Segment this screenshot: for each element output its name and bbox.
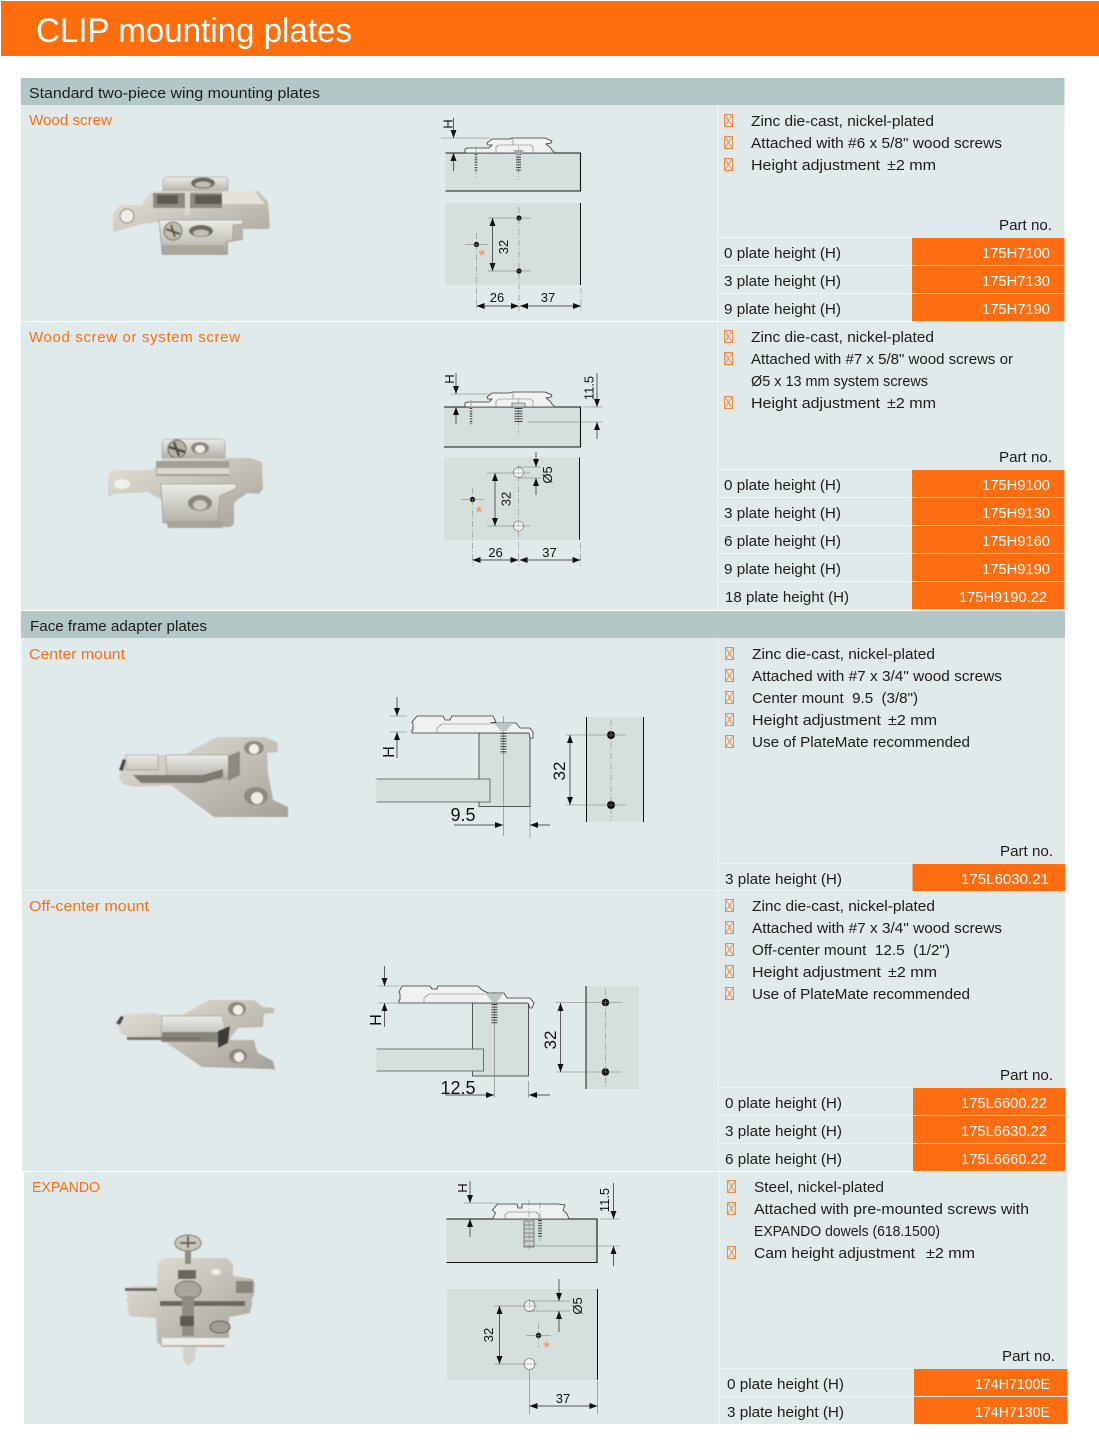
part number table: 175H9130 <box>982 505 1050 522</box>
panel: center mount <box>22 638 1065 891</box>
feature list: Attached with #7 x 3/4" wood screws <box>752 920 1002 937</box>
diagram: center mount <box>376 697 644 838</box>
photo: off-center mount plate <box>116 1000 275 1070</box>
photo: system screw plate <box>108 439 263 528</box>
heading: off-center mount: Off-center mount <box>29 898 150 915</box>
diagram: system screw drilling: H <box>442 374 457 384</box>
diagram: system screw drilling <box>442 373 603 566</box>
part number table: Part no. <box>1002 1348 1055 1365</box>
part number table: 3 plate height (H) <box>727 1404 844 1421</box>
title banner <box>1 1 1099 56</box>
part number table: 3 plate height (H) <box>724 273 841 290</box>
heading: wood screw: Wood screw <box>29 112 112 129</box>
panel: EXPANDO <box>24 1172 1068 1424</box>
part number table: 0 plate height (H) <box>724 477 841 494</box>
part number table: 174H7130E <box>975 1404 1050 1421</box>
diagram: system screw drilling: 26 <box>488 545 503 560</box>
part number table: 175H9100 <box>982 477 1050 494</box>
part number table: 3 plate height (H) <box>724 505 841 522</box>
feature list <box>724 113 1002 174</box>
feature list: Height adjustment <box>751 395 881 412</box>
part number table: 6 plate height (H) <box>725 1151 842 1168</box>
feature list: ±2 mm <box>926 1245 975 1262</box>
feature list: Off-center mount 12.5 (1/2") <box>752 942 950 959</box>
feature list <box>726 898 1002 1003</box>
diagram: system screw drilling: 32 <box>498 492 514 506</box>
part number table: 9 plate height (H) <box>724 561 841 578</box>
diagram: EXPANDO drilling: * <box>543 1338 550 1357</box>
heading: EXPANDO: EXPANDO <box>32 1179 100 1196</box>
part number table: 175L6660.22 <box>961 1151 1047 1168</box>
title: CLIP mounting plates <box>36 12 352 50</box>
diagram: system screw drilling: 11.5 <box>582 376 596 400</box>
feature list <box>728 1179 1029 1262</box>
diagram: system screw drilling: Ø5 <box>540 466 555 484</box>
feature list: Ø5 x 13 mm system screws <box>751 373 928 390</box>
feature list: ±2 mm <box>888 964 937 981</box>
diagram: EXPANDO drilling: 32 <box>481 1328 496 1342</box>
photo: wood screw plate <box>113 177 270 255</box>
feature list: Cam height adjustment <box>754 1245 916 1262</box>
diagram: wood screw drilling: 32 <box>496 240 511 254</box>
feature list: Zinc die-cast, nickel-plated <box>751 113 934 130</box>
part number table: 175L6630.22 <box>961 1123 1047 1140</box>
part number table: 9 plate height (H) <box>724 301 841 318</box>
part number table: Part no. <box>1000 1067 1053 1084</box>
part number table: 175H7100 <box>982 245 1050 262</box>
diagram: off-center mount: 12.5 <box>440 1078 476 1098</box>
diagram: off-center mount: 32 <box>541 1031 560 1049</box>
photo: EXPANDO plate <box>125 1235 255 1365</box>
part number table: 0 plate height (H) <box>724 245 841 262</box>
feature list: ±2 mm <box>887 157 936 174</box>
feature list: Steel, nickel-plated <box>754 1179 884 1196</box>
diagram: center mount: H <box>381 746 398 758</box>
part number table: 175L6030.21 <box>961 871 1049 888</box>
section band: face frame adapter plates: Face frame adapter plates <box>30 618 207 635</box>
heading: center mount: Center mount <box>29 646 126 663</box>
feature list: Center mount 9.5 (3/8") <box>752 690 918 707</box>
feature list: Zinc die-cast, nickel-plated <box>752 898 935 915</box>
feature list: Height adjustment <box>752 712 882 729</box>
diagram: wood screw drilling: 26 <box>490 290 504 305</box>
part number table <box>718 843 1065 891</box>
diagram: wood screw drilling <box>440 118 581 311</box>
feature list: Height adjustment <box>751 157 881 174</box>
feature list: Attached with pre-mounted screws with <box>754 1201 1029 1218</box>
diagram: wood screw drilling: 37 <box>541 290 555 305</box>
diagram: system screw drilling: * <box>476 503 483 522</box>
part number table: 175L6600.22 <box>961 1095 1047 1112</box>
part number table <box>717 449 1064 609</box>
feature list: Zinc die-cast, nickel-plated <box>752 646 935 663</box>
part number table: Part no. <box>999 217 1052 234</box>
feature list: Height adjustment <box>752 964 882 981</box>
feature list <box>726 646 1002 751</box>
feature list: Zinc die-cast, nickel-plated <box>751 329 934 346</box>
feature list: EXPANDO dowels (618.1500) <box>754 1223 940 1240</box>
part number table: 175H9190 <box>982 561 1050 578</box>
diagram: center mount: 32 <box>550 762 569 780</box>
part number table: 174H7100E <box>975 1376 1050 1393</box>
feature list: Attached with #7 x 5/8" wood screws or <box>751 351 1013 368</box>
panel: wood screw or system screw <box>21 322 1064 610</box>
part number table <box>717 217 1064 321</box>
feature list <box>724 329 1013 412</box>
part number table <box>719 1348 1068 1424</box>
diagram: EXPANDO drilling <box>446 1181 620 1414</box>
feature list: Use of PlateMate recommended <box>752 734 970 751</box>
part number table: 175H7190 <box>982 301 1050 318</box>
part number table: 18 plate height (H) <box>725 589 849 606</box>
diagram: off-center mount <box>368 966 639 1098</box>
part number table: 175H9160 <box>982 533 1050 550</box>
diagram: system screw drilling: 37 <box>542 545 557 560</box>
section band: face frame adapter plates <box>21 611 1065 638</box>
part number table: 6 plate height (H) <box>724 533 841 550</box>
heading: wood screw or system screw: Wood screw or system screw <box>29 329 240 346</box>
feature list: ±2 mm <box>888 712 937 729</box>
part number table: 0 plate height (H) <box>725 1095 842 1112</box>
feature list: Attached with #7 x 3/4" wood screws <box>752 668 1002 685</box>
part number table: Part no. <box>999 449 1052 466</box>
feature list: ±2 mm <box>887 395 936 412</box>
diagram: EXPANDO drilling: 37 <box>556 1391 570 1406</box>
part number table: 175H7130 <box>982 273 1050 290</box>
part number table <box>718 1067 1066 1171</box>
panel: wood screw <box>21 105 1064 321</box>
section band: standard two-piece plates <box>21 78 1064 105</box>
diagram: wood screw drilling: * <box>479 246 486 265</box>
diagram: center mount: 9.5 <box>450 805 476 825</box>
feature list: Use of PlateMate recommended <box>752 986 970 1003</box>
section band: standard two-piece plates: Standard two-piece wing mounting plates <box>29 85 320 102</box>
part number table: Part no. <box>1000 843 1053 860</box>
diagram: EXPANDO drilling: Ø5 <box>570 1297 585 1315</box>
diagram: EXPANDO drilling: H <box>455 1183 470 1193</box>
part number table: 3 plate height (H) <box>725 871 842 888</box>
diagram: EXPANDO drilling: 11.5 <box>597 1188 612 1212</box>
diagram: wood screw drilling: H <box>440 119 456 129</box>
part number table: 3 plate height (H) <box>725 1123 842 1140</box>
part number table: 175H9190.22 <box>959 589 1047 606</box>
part number table: 0 plate height (H) <box>727 1376 844 1393</box>
panel: off-center mount <box>22 891 1066 1171</box>
photo: center mount plate <box>119 737 288 817</box>
feature list: Attached with #6 x 5/8" wood screws <box>751 135 1002 152</box>
diagram: off-center mount: H <box>368 1014 385 1026</box>
